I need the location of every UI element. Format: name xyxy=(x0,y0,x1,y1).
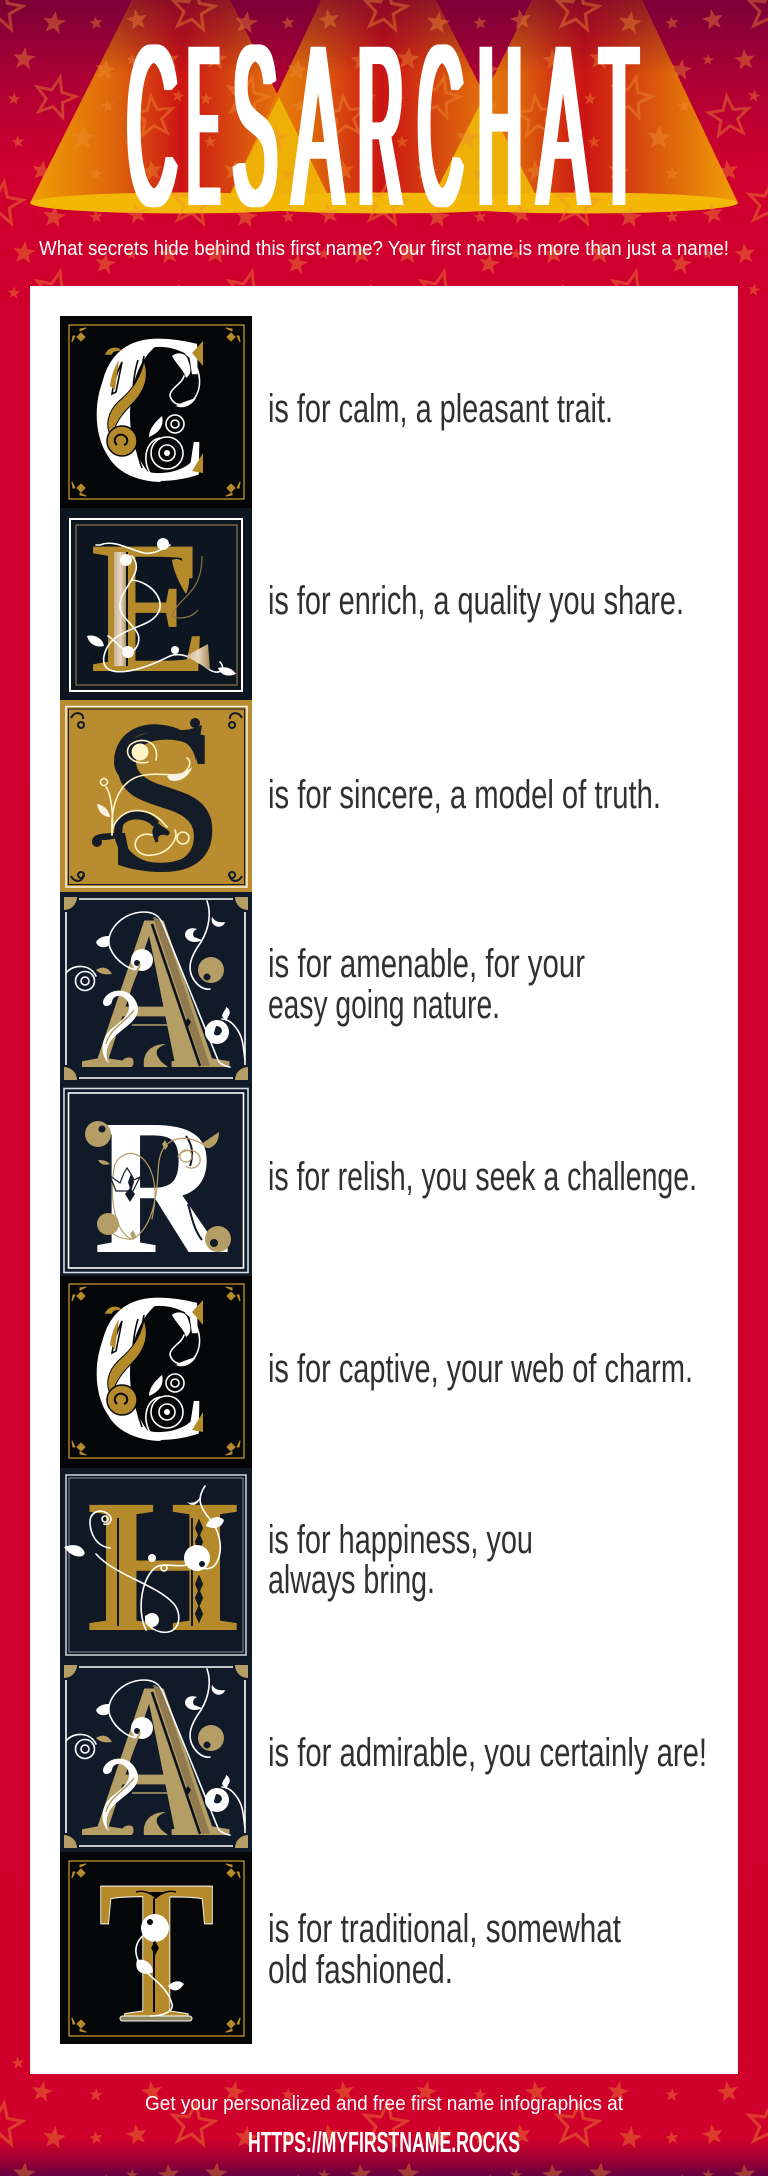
tagline: What secrets hide behind this first name? Your first name is more than just a name! xyxy=(39,238,729,260)
tile: E for enrich xyxy=(60,503,252,713)
footer text: Get your personalized and free first name infographics at xyxy=(145,2093,623,2115)
tile: C for captive: C xyxy=(92,1249,209,1484)
text: T line: is for traditional, somewhat xyxy=(268,1907,621,1951)
tile: A for amenable: A xyxy=(80,870,231,1116)
tile: S for sincere xyxy=(60,684,252,916)
title: C xyxy=(418,0,463,254)
star pattern: bottom xyxy=(0,2056,768,2176)
title: E xyxy=(188,0,219,254)
tile: T for traditional: T xyxy=(98,1837,215,2066)
title: H xyxy=(478,0,522,254)
tile: E for enrich: E xyxy=(90,503,209,713)
title xyxy=(127,0,638,254)
panel: white content xyxy=(30,286,738,2074)
text: A line: is for amenable, for your xyxy=(268,942,585,986)
tile: C for calm: C xyxy=(92,290,209,525)
text: T line: old fashioned. xyxy=(268,1948,453,1992)
tile: H for happiness: H xyxy=(86,1461,240,1672)
text: H line: is for happiness, you xyxy=(268,1518,533,1562)
tile: S for sincere: S xyxy=(103,684,226,916)
title: C xyxy=(127,0,177,254)
tile: R for relish: R xyxy=(93,1079,228,1294)
title: S xyxy=(233,0,277,254)
footer url: HTTPS://MYFIRSTNAME.ROCKS xyxy=(248,2127,520,2159)
title: A xyxy=(538,0,588,254)
text: T xyxy=(600,0,638,254)
title: A xyxy=(293,0,343,254)
text: H line: always bring. xyxy=(268,1558,435,1602)
tile: A for admirable: A xyxy=(80,1638,231,1884)
spotlights xyxy=(30,0,738,214)
star pattern: top xyxy=(0,0,768,300)
text: A line: easy going nature. xyxy=(268,983,500,1027)
title: R xyxy=(358,0,403,254)
text: C line: is for calm, a pleasant trait. xyxy=(268,387,613,431)
